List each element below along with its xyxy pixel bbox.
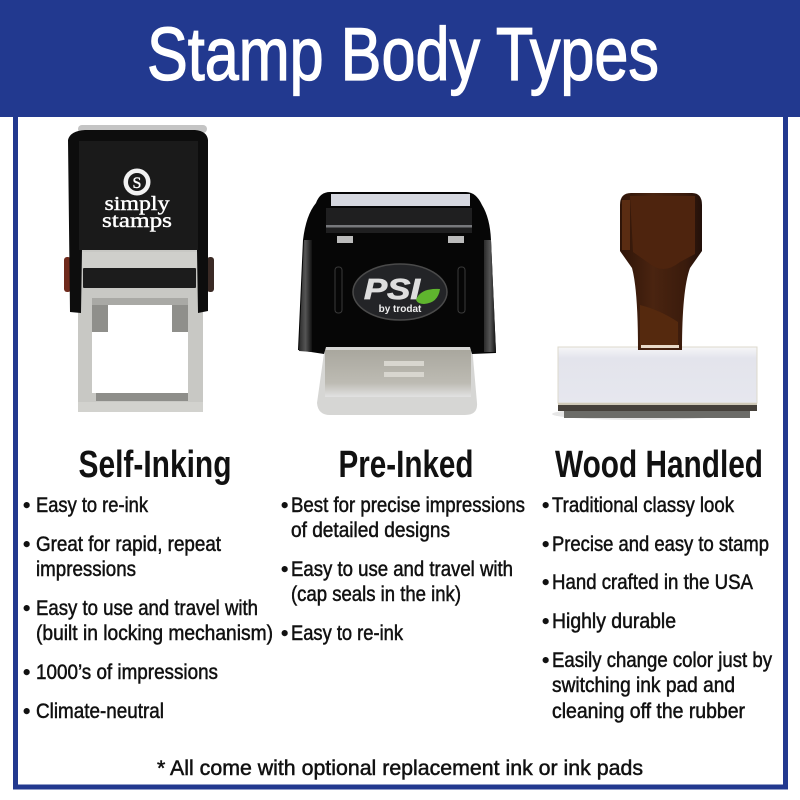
icon: pre-inked stamp [298,192,496,415]
list: pre-inked benefits: • [281,558,288,581]
heading: Pre-Inked: Pre-Inked [338,444,474,486]
logo: PSI by trodat: by trodat [379,304,422,315]
list: wood handled benefits: • [542,571,549,594]
list: pre-inked benefits [281,494,525,645]
footnote: * All come with optional replacement ink or ink pads [157,757,643,780]
list: self-inking benefits: • [23,533,30,556]
logo: simply stamps: stamps [102,210,172,232]
list: wood handled benefits: Highly durable [552,610,676,633]
list: pre-inked benefits: • [281,494,288,517]
list: pre-inked benefits: (cap seals in the ink) [291,583,461,606]
list: pre-inked benefits: Easy to re-ink [291,622,403,645]
list: wood handled benefits: Precise and easy to stamp [552,533,769,556]
list: wood handled benefits: Traditional classy look [552,494,734,517]
list: pre-inked benefits: of detailed designs [291,519,450,542]
logo: PSI by trodat [353,264,447,320]
logo: simply stamps: S [133,175,141,192]
list: self-inking benefits: • [23,661,30,684]
list: wood handled benefits [542,494,772,723]
list: pre-inked benefits: Best for precise impressions [291,494,525,517]
icon: self-inking stamp [64,125,214,412]
list: wood handled benefits: • [542,494,549,517]
list: wood handled benefits: • [542,649,549,672]
list: self-inking benefits: Easy to re-ink [36,494,148,517]
list: self-inking benefits: Easy to use and travel with [36,597,258,620]
header banner [0,0,800,117]
list: self-inking benefits: (built in locking mechanism) [36,622,273,645]
list: wood handled benefits: switching ink pad and [552,674,735,697]
list: wood handled benefits: • [542,610,549,633]
list: pre-inked benefits: • [281,622,288,645]
list: wood handled benefits: • [542,533,549,556]
list: self-inking benefits: impressions [36,558,136,581]
list: self-inking benefits: Great for rapid, repeat [36,533,221,556]
list: self-inking benefits: 1000’s of impressions [36,661,218,684]
title: Stamp Body Types [147,12,659,96]
list: self-inking benefits: • [23,494,30,517]
icon: wood handled stamp [552,193,757,420]
list: self-inking benefits [23,494,273,723]
list: self-inking benefits: • [23,700,30,723]
list: wood handled benefits: cleaning off the rubber [552,700,745,723]
logo: simply stamps [102,168,172,232]
heading: Self-Inking: Self-Inking [78,444,232,486]
logo: simply stamps: simply [104,193,170,215]
list: wood handled benefits: Easily change color just by [552,649,772,672]
list: pre-inked benefits: Easy to use and travel with [291,558,513,581]
list: self-inking benefits: Climate-neutral [36,700,164,723]
list: wood handled benefits: Hand crafted in the USA [552,571,753,594]
list: self-inking benefits: • [23,597,30,620]
logo: PSI by trodat: PSI [364,274,421,306]
